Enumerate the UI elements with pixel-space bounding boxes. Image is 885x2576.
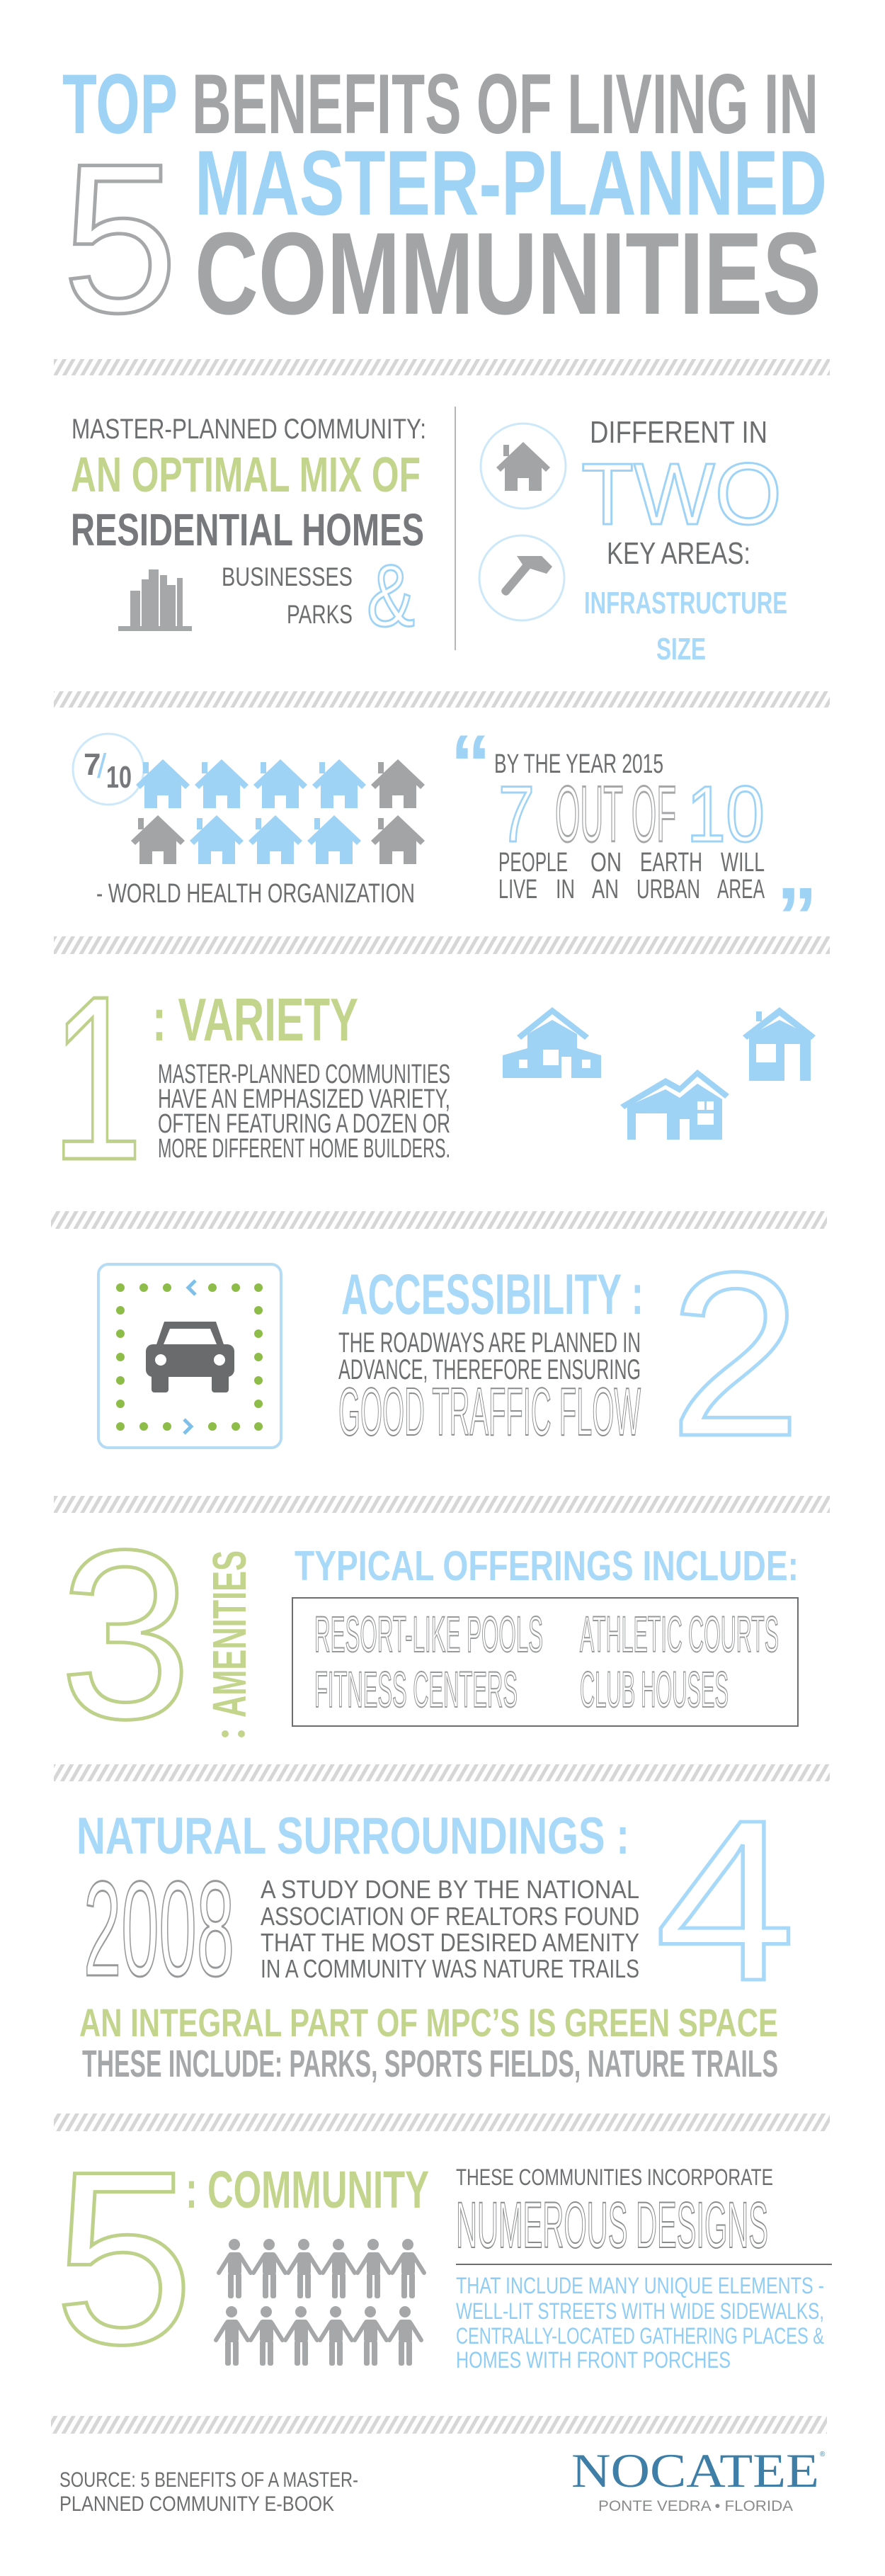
text: master-planned community: MASTER-PLANNED COMMUNITY: [72,414,426,445]
text: people on earth: PEOPLE [498,848,568,878]
text: different in: DIFFERENT IN [590,415,767,450]
icon: 7/10 circle [73,734,144,805]
logo: nocatee: ® [820,2451,826,2458]
logo: nocatee [571,2444,826,2514]
text: study paragraph: THAT THE MOST DESIRED AMENITY [261,1928,639,1957]
text: roadways [338,1327,641,1385]
text: these communities incorporate: THESE COMMUNITIES INCORPORATE [456,2164,773,2190]
text: size: SIZE [656,632,706,666]
number: 1: 1 [51,947,143,1208]
panel: different in two key areas [479,415,787,666]
panel: 2 accessibility [98,1223,801,1485]
text: source: SOURCE: 5 BENEFITS OF A MASTER- [59,2468,358,2492]
box: offerings list: FITNESS CENTERS [314,1662,518,1718]
icon: people rows [216,2239,424,2366]
heading: community: : COMMUNITY [185,2160,429,2219]
text: study paragraph: ASSOCIATION OF REALTORS FOUND [261,1902,639,1931]
title: big outline 5: 5 [62,119,178,357]
text: 7 out of 10: 7 [498,770,535,858]
text: 7 out of 10: 10 [687,770,765,858]
panel: quote [450,719,817,962]
box: offerings list [292,1598,798,1726]
heading: accessibility: ACCESSIBILITY : [341,1263,644,1327]
text: live in urban area [498,875,765,904]
panel: 5 community [54,2120,832,2395]
text: people on earth [498,848,765,878]
text: businesses: BUSINESSES [222,562,353,591]
text: variety paragraph: HAVE AN EMPHASIZED VARIETY, [158,1084,450,1114]
chart: house pictogram [131,759,425,864]
text: live in urban area: IN [556,875,575,904]
text: 7 out of 10 [498,770,765,858]
number: 3: 3 [59,1500,192,1769]
text: live in urban area: LIVE [498,875,537,904]
text: source: PLANNED COMMUNITY E-BOOK [59,2492,334,2516]
text: people on earth: EARTH [640,848,702,878]
number: 4: 4 [655,1772,796,2029]
text: by the year 2015: BY THE YEAR 2015 [494,749,663,779]
icon: 7/10 circle: 10 [106,760,132,795]
text: 7 out of 10: OUT OF [555,770,676,858]
icon: ampersand: & [367,547,415,645]
icon: house circle [481,424,566,509]
text: variety paragraph [158,1060,450,1164]
text: live in urban area: AREA [717,875,765,904]
panel: 1 variety [51,947,816,1208]
text: variety paragraph: MASTER-PLANNED COMMUNITIES [158,1060,450,1089]
text: unique elements: HOMES WITH FRONT PORCHES [456,2347,731,2373]
icon: close quote: ” [777,871,817,962]
text: residential homes: RESIDENTIAL HOMES [71,504,424,555]
text: live in urban area: AN [592,875,619,904]
text: study paragraph [261,1875,639,1983]
icon: city skyline [118,569,192,631]
title [62,57,827,357]
text: source [59,2468,358,2516]
logo: nocatee: PONTE VEDRA • FLORIDA [598,2498,793,2514]
text: study paragraph: A STUDY DONE BY THE NATIONAL [261,1875,639,1904]
text: variety paragraph: OFTEN FEATURING A DOZEN OR [158,1109,450,1139]
number: 2: 2 [669,1223,801,1485]
box: offerings list: RESORT-LIKE POOLS [314,1607,543,1663]
text: variety paragraph: MORE DIFFERENT HOME BUILDERS. [158,1134,450,1164]
text: unique elements [456,2273,824,2373]
icon: blue houses [503,1007,816,1140]
icon: open quote: “ [450,719,491,810]
panel: 3 amenities [59,1500,799,1769]
panel: definition [71,414,426,645]
text: parks: PARKS [287,600,353,629]
icon: car road box [98,1264,281,1448]
heading: variety: : VARIETY [152,987,358,1054]
icon: 7/10 circle: / [97,748,107,785]
text: roadways: THE ROADWAYS ARE PLANNED IN [338,1327,641,1358]
text: people on earth: WILL [721,848,765,878]
logo: nocatee: NOCATEE [571,2444,819,2497]
text: people on earth: ON [590,848,622,878]
text: roadways: ADVANCE, THEREFORE ENSURING [338,1354,641,1385]
text: an optimal mix of: AN OPTIMAL MIX OF [71,447,421,502]
text: study paragraph: IN A COMMUNITY WAS NATURE TRAILS [261,1954,639,1983]
icon: 7/10 circle: 7 [84,747,101,782]
text: TWO outline: TWO [581,446,782,543]
text: 2008: 2008 [84,1854,234,2004]
title: TOP: TOP [62,57,178,152]
text: live in urban area: URBAN [636,875,700,904]
heading: amenities vertical: AMENITIES [203,1550,256,1718]
number: 5: 5 [54,2120,194,2395]
icon: hammer circle [479,535,564,620]
panel: 7 of 10 houses [73,734,425,909]
text: infrastructure: INFRASTRUCTURE [584,586,787,620]
text: key areas: KEY AREAS: [607,536,750,571]
footer [59,2444,826,2516]
heading: amenities vertical [203,1550,256,1737]
panel: 4 natural surroundings [76,1772,796,2085]
heading: natural surroundings: NATURAL SURROUNDINGS : [76,1808,629,1865]
text: world health organization: - WORLD HEALTH ORGANIZATION [96,879,415,909]
